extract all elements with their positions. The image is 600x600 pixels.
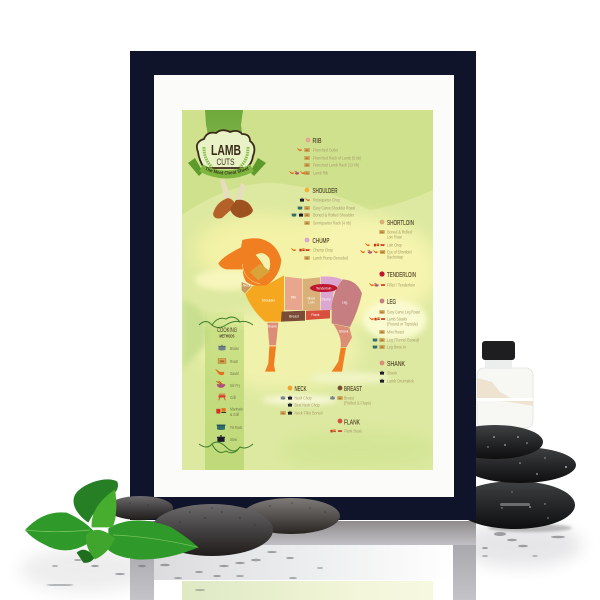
cut labels: Shoulder xyxy=(262,298,276,302)
bottom vine ornament xyxy=(199,442,253,453)
shoulder xyxy=(245,275,284,322)
legend: marinate and grill: Marinate xyxy=(230,406,243,412)
legend: saute: Sauté xyxy=(230,371,239,376)
tenderloin cuts list: Fillet / Tenderloin xyxy=(387,282,415,288)
legend: braise: Braise xyxy=(230,346,239,351)
top vine ornament xyxy=(199,317,253,328)
section: neck xyxy=(281,384,323,416)
neck cuts list: Best Neck Chop xyxy=(294,402,320,408)
flank xyxy=(306,310,330,320)
shoulder cuts list: Boned & Rolled Shoulder xyxy=(313,212,354,218)
section: shank xyxy=(380,359,415,384)
poster: lamb cuts infographic xyxy=(182,110,433,470)
rib cuts list xyxy=(289,148,361,176)
leg cuts list: Lamb Steaks xyxy=(387,316,408,322)
table reflection and water droplets xyxy=(20,521,582,600)
white mat xyxy=(154,75,454,497)
section: shoulder xyxy=(292,186,356,226)
heading: shoulder: SHOULDER xyxy=(312,186,338,195)
rear shank xyxy=(333,324,352,347)
shoulder cuts list: Rotisquarter Chop xyxy=(313,198,340,202)
ribbon text: The Meat Cheat Sheet xyxy=(206,166,249,174)
breast xyxy=(281,311,305,322)
shank cuts list xyxy=(380,370,415,384)
front shank xyxy=(267,323,278,345)
ribbon xyxy=(188,158,266,176)
shoulder cuts list xyxy=(292,198,356,226)
cut labels: Neck xyxy=(243,283,251,287)
shortloin cuts list xyxy=(360,230,413,260)
legend: pot roast: Pot Roast xyxy=(230,425,242,430)
leg cuts list xyxy=(369,310,421,350)
chump cuts list xyxy=(291,248,348,260)
neck cuts list xyxy=(281,396,323,416)
bottle xyxy=(477,341,533,428)
legend: stir fry: Stir Fry xyxy=(230,383,240,388)
wheat sprigs xyxy=(204,147,248,167)
chump xyxy=(321,276,342,310)
heading: leg: LEG xyxy=(387,297,396,306)
cut labels: Leg xyxy=(342,300,348,304)
green mint leaves xyxy=(25,479,198,563)
cooking methods strip xyxy=(205,312,244,470)
section: chump xyxy=(291,236,348,260)
rib cuts list: Frenched Lamb Rack (13 rib) xyxy=(313,162,359,168)
icon: lamb chops xyxy=(213,179,253,218)
heading line two: METHODS xyxy=(220,334,234,338)
head and horn xyxy=(218,238,281,286)
shortloin cuts list: Loin Chop xyxy=(387,242,402,248)
heading: shank: SHANK xyxy=(387,359,405,368)
section: rib xyxy=(289,136,361,176)
chump cuts list: Chump Chop xyxy=(313,248,333,252)
cut labels: Tenderloin xyxy=(316,286,331,290)
diagram: sheep with labelled cuts xyxy=(218,238,362,372)
heading: tenderloin: TENDERLOIN xyxy=(387,270,416,279)
cut labels: Shank xyxy=(267,324,277,328)
legend: roast: Roast xyxy=(230,359,238,364)
cooking methods legend xyxy=(199,317,253,453)
section: leg xyxy=(369,297,421,350)
breast cuts list xyxy=(330,396,371,406)
section: breast xyxy=(330,384,371,406)
top green strip xyxy=(205,110,243,170)
shortloin xyxy=(303,277,320,310)
breast cuts list: Breast xyxy=(344,396,355,400)
title: LAMB: LAMB xyxy=(211,142,241,159)
cut labels: Short xyxy=(307,296,315,300)
poster watercolor background xyxy=(182,110,440,470)
heading: chump: CHUMP xyxy=(312,236,330,245)
throat xyxy=(250,264,270,280)
legend: grill: Grill xyxy=(230,395,236,400)
shoulder cuts list: Semiquarter Rack (4 rib) xyxy=(313,220,351,226)
legend: marinate and grill: & Grill xyxy=(230,412,239,417)
tenderloin xyxy=(310,284,337,292)
shortloin cuts list: Loin Roast xyxy=(387,234,402,240)
shoulder cuts list: Easy Carve Shoulder Roast xyxy=(313,206,356,210)
leg xyxy=(332,279,362,327)
cut labels: Shank xyxy=(339,330,349,334)
front foot xyxy=(265,346,276,372)
neck xyxy=(242,282,252,293)
neck cuts list: Neck Chop xyxy=(294,396,312,400)
rear foot xyxy=(332,348,346,372)
leg cuts list: Easy Carve Leg Roast xyxy=(387,310,421,314)
cut labels xyxy=(243,283,349,334)
section: flank xyxy=(330,418,363,434)
shortloin cuts list: Boned & Rolled xyxy=(387,230,412,234)
leg cuts list: Leg (Tunnel Boned) xyxy=(387,338,419,342)
logo badge: Lamb Cuts xyxy=(188,129,266,178)
heading: shortloin: SHORTLOIN xyxy=(387,218,414,227)
cut labels: Rib xyxy=(291,296,296,300)
leg cuts list: (Round or Topside) xyxy=(387,322,418,326)
legend: stew: Stew xyxy=(230,437,237,442)
heading: rib: RIB xyxy=(312,136,322,145)
heading: cooking methods: COOKING xyxy=(217,328,237,334)
breast cuts list: (Rolled & Flaps) xyxy=(344,400,371,406)
leg cuts list: Mini Roast xyxy=(387,330,405,334)
rib cuts list: Lamb Rib xyxy=(313,170,328,176)
section: shortloin xyxy=(360,218,414,260)
shank cuts list: Shank xyxy=(387,370,398,376)
rib cuts list: Frenched Cutlet xyxy=(313,148,339,152)
shortloin cuts list: Backstrap xyxy=(387,254,403,260)
shortloin cuts list: Eye of Shortloin/ xyxy=(387,250,413,254)
heading: neck: NECK xyxy=(294,384,306,393)
picture frame xyxy=(130,51,476,520)
heading: flank: FLANK xyxy=(344,418,360,426)
legend: marinate and grill xyxy=(216,406,243,417)
cut labels: Loin xyxy=(308,300,315,304)
section: tenderloin xyxy=(369,270,416,288)
subtitle: CUTS: CUTS xyxy=(216,157,234,167)
shank cuts list: Lamb Drumstick xyxy=(387,378,415,384)
cut labels: Flank xyxy=(311,313,320,317)
stacked black stones xyxy=(447,425,576,532)
cut labels: Chump xyxy=(320,297,331,301)
chump cuts list: Lamb Rump Denuded xyxy=(313,256,348,260)
neck cuts list: Neck Fillet Boned xyxy=(294,410,323,416)
black stones at the foot of the frame xyxy=(107,496,340,556)
heading: breast: BREAST xyxy=(344,384,362,393)
cut labels: Breast xyxy=(289,314,299,318)
flank cuts list: Flank Steak xyxy=(344,428,363,434)
leg cuts list: Leg Bone In xyxy=(387,344,406,350)
rib xyxy=(285,277,302,310)
rib cuts list: Frenched Rack of Lamb (8 rib) xyxy=(313,156,361,160)
